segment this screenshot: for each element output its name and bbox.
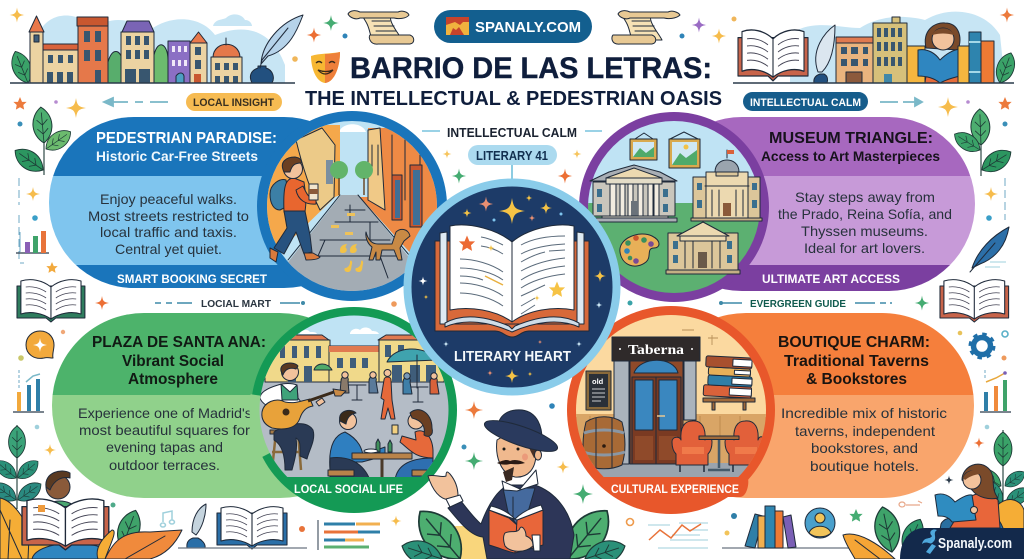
label: evergreen guide: EVERGREEN GUIDE bbox=[750, 298, 846, 310]
body text: Thyssen museums. bbox=[801, 223, 928, 239]
subheading bbox=[122, 353, 224, 388]
decorations: right header sparkles bbox=[680, 8, 1014, 44]
museum: Reina Sofia bbox=[691, 150, 762, 221]
barrel bbox=[583, 417, 625, 469]
illustration: left city skyline with quill bbox=[7, 14, 303, 86]
icon: quill right bbox=[970, 227, 1009, 272]
label: CULTURAL EXPERIENCE bbox=[611, 484, 739, 496]
badge: local insight bbox=[186, 93, 282, 111]
logo pill: SPANALY.COM bbox=[475, 19, 581, 36]
illustration: central writer figure bbox=[399, 410, 628, 559]
label: local mart: LOCIAL MART bbox=[201, 298, 272, 310]
figure: dog bbox=[366, 229, 410, 260]
illustration: right books, quill, buildings and reader bbox=[733, 12, 1019, 86]
badge: intellectual calm bbox=[743, 92, 868, 111]
body text: Incredible mix of historic bbox=[781, 405, 947, 421]
icon: open book left bbox=[17, 280, 85, 322]
cafe tables background bbox=[340, 372, 439, 402]
face bbox=[497, 432, 536, 477]
decorations: right mid sparkles bbox=[914, 296, 1008, 448]
subheading: Vibrant Social bbox=[122, 353, 224, 370]
body text: Central yet quiet. bbox=[115, 241, 222, 257]
icon: theatre mask bbox=[311, 52, 340, 83]
label: LITERARY HEART bbox=[454, 348, 571, 365]
hand bbox=[428, 472, 458, 500]
decorations: bottom-centre-right icons bbox=[626, 513, 737, 548]
paintings bbox=[630, 132, 700, 168]
hat bbox=[482, 410, 560, 458]
heading: MUSEUM TRIANGLE: bbox=[769, 130, 933, 147]
body text: Enjoy peaceful walks. bbox=[100, 191, 237, 207]
scene circle: tavern bbox=[567, 306, 775, 514]
central badge: literary heart bbox=[404, 178, 620, 396]
panel: pedestrian paradise bbox=[40, 111, 448, 301]
book stack on shelf bbox=[703, 356, 755, 410]
icon: open book right bbox=[940, 280, 1009, 322]
panel: plaza de santa ana bbox=[45, 307, 457, 513]
body text: outdoor terraces. bbox=[109, 457, 220, 473]
subheading: Traditional Taverns bbox=[784, 353, 929, 370]
decorations: left mid sparkles bbox=[18, 296, 109, 456]
arrow: intellectual calm bbox=[880, 98, 922, 106]
body text: local traffic and taxis. bbox=[100, 224, 237, 240]
badge: literary 41 bbox=[468, 145, 557, 180]
tavern sign bbox=[612, 337, 700, 361]
icon: chat bubble bbox=[26, 331, 54, 358]
icon: book row bbox=[722, 506, 850, 548]
figure: walking man bbox=[270, 157, 320, 262]
chalkboard: old bbox=[592, 377, 604, 386]
icon: chart left bbox=[13, 370, 44, 412]
heading: PEDESTRIAN PARADISE: bbox=[96, 130, 277, 147]
body text: Experience one of Madrid's bbox=[78, 405, 252, 421]
heading: BOUTIQUE CHARM: bbox=[778, 334, 930, 351]
decorations: left margin leaves and icons bbox=[10, 97, 86, 273]
decorations: centre sparkles bbox=[442, 150, 582, 184]
stars in central badge bbox=[418, 194, 606, 383]
illustration: bottom-right plants and reader bbox=[843, 430, 1024, 559]
body text: Ideal for art lovers. bbox=[804, 240, 925, 256]
armchairs and table bbox=[672, 421, 765, 472]
subtitle: THE INTELLECTUAL & PEDESTRIAN OASIS bbox=[305, 88, 722, 110]
badge: literary 41: LITERARY 41 bbox=[476, 148, 548, 163]
decorations: right margin leaves and icons bbox=[938, 97, 1016, 221]
guitarist bbox=[260, 363, 346, 470]
scene circle: museums bbox=[579, 112, 769, 302]
heading: intellectual calm centre: INTELLECTUAL CALM bbox=[447, 125, 577, 140]
decorations: bottom-left icons bbox=[110, 502, 402, 550]
scene circle: street with walker and dog bbox=[255, 111, 448, 301]
body text: boutique hotels. bbox=[810, 458, 919, 474]
icon: avatar bbox=[805, 508, 835, 538]
subheading: & Bookstores bbox=[806, 371, 907, 388]
body text: most beautiful squares for bbox=[79, 422, 250, 438]
jacket bbox=[448, 485, 574, 559]
logo pill bbox=[434, 10, 592, 43]
icon: gear bbox=[970, 334, 994, 358]
arrow: local insight bbox=[104, 98, 168, 106]
subheading: Atmosphere bbox=[128, 371, 218, 388]
subheading: Access to Art Masterpieces bbox=[761, 148, 940, 164]
illustration: bottom-left plants and reader bbox=[0, 425, 182, 559]
label: local mart bbox=[155, 298, 305, 310]
body text: evening tapas and bbox=[106, 439, 223, 455]
body text: taverns, independent bbox=[795, 423, 935, 439]
body text bbox=[781, 405, 947, 474]
label: ULTIMATE ART ACCESS bbox=[762, 274, 900, 286]
museum: Thyssen bbox=[666, 222, 740, 274]
chalkboard bbox=[586, 371, 611, 410]
badge: local insight: LOCAL INSIGHT bbox=[193, 97, 274, 109]
body text bbox=[778, 189, 952, 256]
open book bbox=[435, 225, 589, 337]
label: SMART BOOKING SECRET bbox=[117, 274, 267, 286]
icon: scroll left bbox=[348, 11, 414, 44]
label: LOCAL SOCIAL LIFE bbox=[294, 484, 403, 496]
panel: museum triangle bbox=[579, 112, 990, 302]
subheading: Historic Car-Free Streets bbox=[96, 148, 258, 164]
icon: chart right bbox=[980, 370, 1011, 412]
label: evergreen guide bbox=[719, 298, 892, 310]
held book bbox=[489, 510, 517, 553]
subheading bbox=[784, 353, 929, 388]
body text bbox=[78, 405, 252, 473]
title: BARRIO DE LAS LETRAS: bbox=[350, 52, 712, 85]
body text bbox=[88, 191, 249, 257]
museum: Prado bbox=[590, 165, 677, 222]
decorations: left header sparkles bbox=[10, 8, 348, 62]
tavern sign: Taberna bbox=[628, 343, 684, 358]
brand badge: Spanaly.com bbox=[900, 528, 1024, 559]
body text: bookstores, and bbox=[811, 440, 918, 456]
body text: Most streets restricted to bbox=[88, 208, 249, 224]
body text: Stay steps away from bbox=[795, 189, 935, 205]
icon: scroll right bbox=[612, 11, 680, 44]
icon: runner logo bbox=[922, 529, 937, 554]
icon: logo flag bbox=[446, 17, 469, 35]
palette bbox=[620, 234, 659, 266]
scene circle: plaza bbox=[251, 307, 457, 513]
panel: boutique charm bbox=[567, 306, 980, 514]
heading: PLAZA DE SANTA ANA: bbox=[92, 334, 266, 351]
badge: intellectual calm: INTELLECTUAL CALM bbox=[750, 97, 861, 109]
icon: mini bar chart left bbox=[16, 231, 49, 253]
couple at table bbox=[328, 410, 433, 480]
decorations: centre bottom sparkles bbox=[391, 300, 632, 504]
body text: the Prado, Reina Sofía, and bbox=[778, 206, 952, 222]
